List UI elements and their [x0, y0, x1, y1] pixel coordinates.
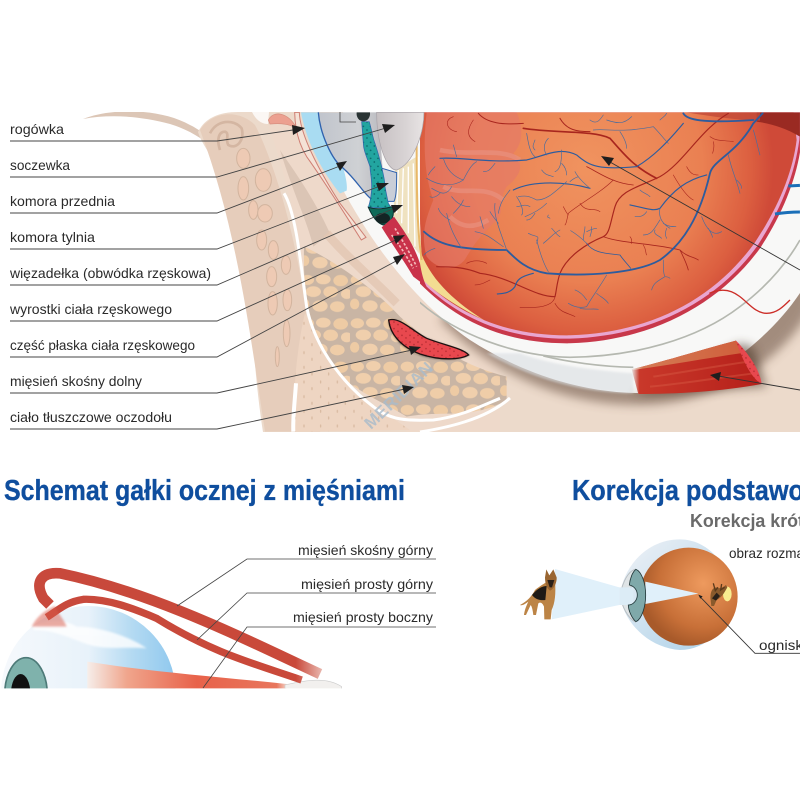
eyeball in zoom coordinates	[410, 110, 800, 393]
lower fat layer	[294, 313, 410, 432]
anterior chamber	[318, 112, 385, 200]
label: ciało tłuszczowe: ciało tłuszczowe oczodołu	[10, 409, 172, 425]
superior rectus muscle	[47, 599, 302, 680]
label: rogówka: rogówka	[10, 121, 64, 137]
lens	[377, 112, 424, 170]
label: część płaska	[10, 254, 405, 357]
retina	[640, 548, 738, 646]
label: więzadełka: więzadełka (obwódka rzęskowa)	[9, 265, 211, 281]
inferior oblique muscle	[389, 320, 469, 359]
eyebrow crescent	[84, 112, 200, 138]
zonule fibres	[393, 157, 422, 257]
label: mięsień prosty boczny	[203, 609, 436, 688]
ciliary processes	[382, 217, 427, 287]
dog	[520, 569, 557, 619]
label: mięsień skośny dolny: mięsień skośny dolny	[10, 373, 142, 389]
label: wyrostki: wyrostki ciała rzęskowego	[9, 301, 172, 317]
red vessel on sclera	[709, 290, 790, 313]
light cone outside eye	[552, 569, 619, 619]
fascia strip lower right	[420, 398, 510, 432]
label: komora przednia	[10, 161, 347, 213]
label: komora tylnia	[10, 183, 389, 249]
right leader: retina vessels	[601, 156, 800, 270]
ciliary muscle teal and dark	[368, 207, 393, 225]
label: część płaska: część płaska ciała rzęskowego	[10, 337, 195, 353]
label: soczewka	[10, 124, 395, 177]
muscle labels	[177, 542, 436, 688]
top right dark sclera	[757, 112, 800, 137]
orbit tissue background	[198, 112, 800, 432]
posterior chamber	[382, 168, 398, 202]
light entering lens	[619, 587, 633, 605]
label: mięsień skośny dolny	[10, 346, 421, 393]
orbital fat	[304, 247, 507, 417]
label: ognisko: ognisk	[759, 637, 800, 653]
light cone inside eye	[645, 582, 698, 604]
iris	[362, 122, 392, 208]
dark soft tissue	[280, 150, 330, 247]
label: soczewka: soczewka	[10, 157, 70, 173]
illustration: myopia eye diagram	[520, 539, 800, 653]
lens	[628, 569, 646, 622]
small bracket leader near iris	[340, 112, 356, 122]
panel: eye cross-section anatomy illustration	[83, 110, 800, 433]
iris cap	[357, 112, 370, 121]
label: komora przednia: komora przednia	[10, 193, 115, 209]
ciliary body and anterior segment	[268, 112, 427, 287]
label: mięsień skośny górny	[177, 542, 436, 606]
inferior rectus muscle	[632, 341, 767, 395]
white gap beside the eyelid	[252, 112, 269, 124]
retina	[412, 110, 800, 343]
label: mięsień prosty górny: mięsień prosty górny	[301, 576, 433, 592]
chamber blue outline	[318, 112, 372, 199]
blue veins	[424, 113, 763, 294]
iris	[5, 658, 47, 732]
upper lid pink	[268, 114, 296, 126]
labels with leader lines: left column	[9, 121, 421, 429]
eyelid tube	[295, 112, 366, 240]
yellow ora band	[420, 254, 484, 320]
label: mięsień prosty boczny: mięsień prosty boczny	[293, 609, 433, 625]
optic nerve	[285, 680, 342, 690]
label: komora tylnia: komora tylnia	[10, 229, 95, 245]
cornea	[301, 112, 347, 193]
label: mięsień skośny górny: mięsień skośny górny	[298, 542, 433, 558]
blue vessels on sclera	[775, 185, 800, 214]
label: więzadełka	[9, 205, 403, 285]
sclera	[620, 539, 732, 650]
orbital bone and skin layers	[200, 114, 507, 432]
label: ciało tłuszczowe	[10, 385, 414, 429]
illustration: eyeball with muscles	[1, 573, 342, 781]
leader to focal point	[698, 595, 800, 653]
label: wyrostki	[9, 235, 405, 321]
right leader: rectus muscle	[710, 372, 800, 390]
inverted dog image	[711, 583, 727, 606]
lateral rectus muscle	[87, 662, 287, 690]
muscle blend on eyeball	[32, 606, 67, 627]
yellow spot	[723, 587, 732, 601]
sclera	[343, 112, 800, 393]
red arteries	[437, 113, 733, 317]
folds of ciliary region	[424, 111, 521, 268]
eyeball	[1, 606, 176, 781]
heading: muscles schematic: Schemat gałki ocznej z mięśniami	[4, 475, 405, 507]
superior oblique muscle	[39, 573, 320, 674]
label: rogówka	[10, 121, 305, 141]
sclera shading lines	[410, 240, 800, 357]
pupil	[11, 674, 30, 713]
label: mięsień prosty górny	[197, 576, 436, 640]
watermark: MERIDIAN	[361, 358, 437, 433]
white fascia gap	[284, 193, 500, 420]
shadow under the eyeball	[436, 293, 800, 411]
